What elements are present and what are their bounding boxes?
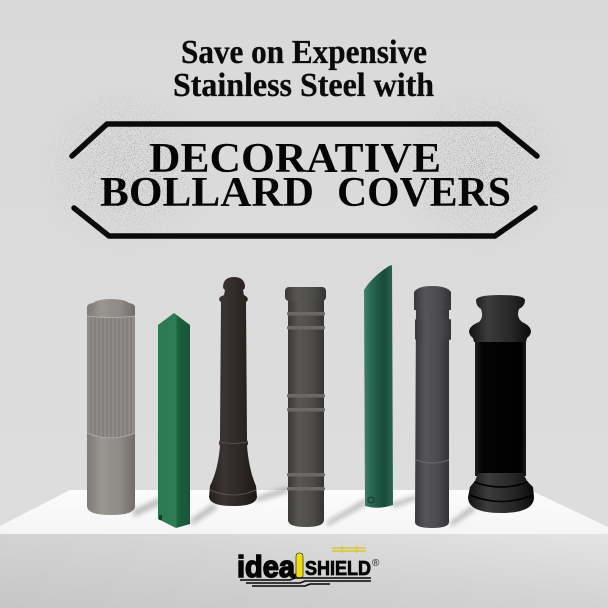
bollard 7: black ornate: [468, 295, 534, 513]
banner title: decorative bollard covers: BOLLARD: [100, 170, 314, 216]
bollard cast shadows: [133, 486, 476, 527]
bollard 1: fluted grey: [87, 299, 135, 515]
logo speed lines: [240, 578, 371, 586]
heading: save on expensive stainless steel: Stainless Steel with: [173, 67, 434, 104]
bollard 3: dark ornamental: [209, 277, 257, 506]
logo rail icon: [332, 546, 366, 553]
logo registered mark: ®: [372, 558, 380, 569]
banner frame: [72, 124, 537, 236]
paint speckle spray behind banner: [42, 92, 564, 244]
banner title: decorative bollard covers: DECORATIVE: [149, 136, 441, 182]
bollard 2: green square: [158, 313, 190, 528]
heading: save on expensive stainless steel: Save on Expensive: [181, 34, 427, 71]
bollard 4: banded charcoal: [285, 287, 326, 527]
logo wordmark idea: idea: [237, 549, 296, 584]
logo wordmark shield: SHIELD: [305, 558, 371, 580]
bollard 5: green slant-top: [364, 265, 393, 508]
banner title: decorative bollard covers: COVERS: [337, 170, 511, 216]
white platform top: [0, 490, 608, 534]
logo: idealSHIELD: [237, 546, 380, 586]
platform front band: [0, 534, 608, 608]
heading: save on expensive stainless steel: [173, 34, 434, 104]
logo yellow bar: [296, 553, 303, 578]
banner title: decorative bollard covers: [100, 136, 511, 216]
bollard 6: slate sleeve: [414, 286, 451, 528]
